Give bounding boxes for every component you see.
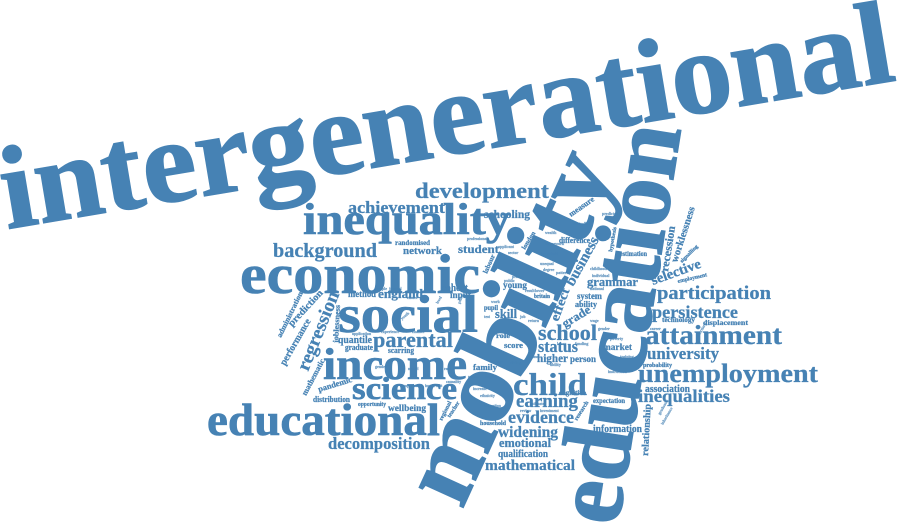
tiny words: degree <box>543 267 554 272</box>
tiny words: gender <box>598 326 610 331</box>
word: background: background <box>273 240 377 262</box>
word: emotional: emotional <box>499 435 551 450</box>
tiny words: increase <box>473 386 487 391</box>
tiny words: job <box>519 314 526 319</box>
word: selective: selective <box>649 257 703 289</box>
tiny words: labor <box>557 341 566 346</box>
tiny words: poverty <box>610 336 623 341</box>
rotated words: pandemic <box>317 375 353 394</box>
word: educational: educational <box>207 395 440 445</box>
rotated words: joblessness <box>331 305 342 344</box>
tiny words: sibling <box>510 360 521 365</box>
tiny words: individual <box>592 273 610 278</box>
medium words: young <box>503 281 527 291</box>
word: development: development <box>415 178 550 203</box>
rotated words: hypothesis <box>608 227 618 252</box>
word: parental: parental <box>373 327 453 352</box>
tiny words: choice <box>407 295 418 300</box>
medium words: expectation <box>593 397 625 405</box>
word: widening: widening <box>498 424 558 441</box>
medium words: distribution <box>313 395 350 404</box>
word: inequalities: inequalities <box>638 386 730 406</box>
tiny words <box>352 211 707 426</box>
rotated words: business <box>563 234 603 289</box>
tiny words: applicant <box>498 244 515 249</box>
tiny words: estimate <box>530 401 544 406</box>
medium words: opportunity <box>358 402 386 408</box>
tiny words: tertiary <box>697 322 707 336</box>
rotated words: labour <box>482 253 497 275</box>
medium words: higher <box>537 351 569 365</box>
tiny words: review <box>520 408 531 413</box>
medium words: ability <box>575 299 598 309</box>
tiny words: migration <box>484 403 502 408</box>
medium words: method <box>348 289 376 299</box>
medium words: market <box>603 343 633 353</box>
rotated words: grade <box>559 302 594 331</box>
tiny words: instruction <box>608 369 627 374</box>
word: science: science <box>352 370 457 406</box>
rotated words: prediction <box>286 288 326 329</box>
word: economic: economic <box>240 244 480 306</box>
tiny words: funding <box>575 341 588 346</box>
tiny words: inheritance <box>660 406 674 426</box>
word: unemployment: unemployment <box>638 359 818 388</box>
tiny words: application <box>352 331 372 336</box>
medium words: displacement <box>703 318 749 327</box>
word: grammar: grammar <box>587 274 638 289</box>
medium words: probability <box>643 362 673 369</box>
tiny words: wage <box>494 359 503 364</box>
rotated words: effect <box>547 285 573 323</box>
tiny words: glass <box>530 354 539 359</box>
tiny words: national <box>590 286 605 291</box>
tiny words: household <box>541 251 559 256</box>
tiny words: public <box>504 278 515 283</box>
tiny words: english <box>485 374 498 379</box>
tiny words: finance <box>412 329 425 334</box>
word: evidence: evidence <box>508 407 574 427</box>
word: achievement: achievement <box>348 198 446 217</box>
medium words: england <box>378 286 424 301</box>
tiny words: model <box>408 366 419 371</box>
tiny words: ability <box>550 362 561 367</box>
tiny words: comparison <box>400 383 421 388</box>
medium words: wellbeing <box>388 404 426 414</box>
tiny words: graduates <box>657 398 670 416</box>
tiny words: return <box>528 318 540 323</box>
rotated words: teacher <box>447 400 462 419</box>
medium words: estimation <box>620 250 647 258</box>
medium words: system <box>577 291 602 301</box>
rotated words: administration <box>275 289 305 339</box>
tiny words: causality <box>446 379 461 384</box>
rotated words: worklessness <box>669 205 698 264</box>
word: regression: regression <box>293 288 344 374</box>
tiny words: predict <box>512 274 525 279</box>
medium words: network <box>403 245 443 257</box>
rotated words: mathematic <box>300 357 327 397</box>
medium words: skill <box>495 306 517 321</box>
tiny words: training <box>620 354 634 359</box>
tiny words: pattern <box>556 270 569 275</box>
medium words: cohort <box>442 283 468 294</box>
word: decomposition: decomposition <box>328 434 431 453</box>
word: status: status <box>538 337 578 356</box>
tiny words: childhood <box>590 266 608 271</box>
rotated words: signalling <box>679 244 700 264</box>
tiny words: gender <box>375 364 387 369</box>
medium words: household <box>480 421 507 427</box>
medium words: schooling <box>484 209 530 221</box>
tiny words: ethnicity <box>480 393 495 398</box>
medium words: information <box>593 424 642 435</box>
tiny words: framework <box>545 241 565 246</box>
tiny words: youth <box>399 310 411 321</box>
tiny words: lower <box>535 288 545 293</box>
word: inequality: inequality <box>303 195 510 244</box>
word: income: income <box>323 340 467 389</box>
rotated words: recession <box>659 225 678 272</box>
tiny words: wage <box>590 318 599 323</box>
tiny words: career <box>650 326 661 331</box>
word: qualification: qualification <box>498 449 548 460</box>
medium words <box>313 209 749 435</box>
rotated words: measure <box>567 194 596 219</box>
word: participation: participation <box>657 283 771 304</box>
medium words: student <box>458 242 499 256</box>
tiny words: region <box>468 374 480 379</box>
word: persistence: persistence <box>652 302 738 322</box>
rotated words: relationship <box>640 403 654 456</box>
medium words: scarring <box>388 346 414 355</box>
medium words: graduate <box>345 343 373 352</box>
tiny words: race <box>444 366 452 371</box>
rotated words: performance <box>278 317 314 368</box>
word: attainment: attainment <box>645 320 782 350</box>
rotated words: london <box>521 230 537 251</box>
tiny words: investment <box>540 408 559 413</box>
tiny words: controlled <box>573 221 591 226</box>
tiny words: professional <box>467 236 488 241</box>
tiny words: sector <box>508 250 518 255</box>
tiny words: level <box>435 294 443 304</box>
word: education: education <box>533 116 703 525</box>
rotated words: regional <box>438 400 453 422</box>
word: university: university <box>647 344 719 363</box>
tiny words: important <box>425 383 443 388</box>
word: earning: earning <box>516 391 578 412</box>
tiny words: experience <box>381 329 399 334</box>
medium words: difference <box>559 236 590 245</box>
word: school: school <box>538 320 597 345</box>
rotated words <box>275 194 708 456</box>
word: mathematical: mathematical <box>485 458 575 474</box>
tiny words: journal <box>388 286 403 291</box>
medium words: association <box>645 384 690 395</box>
tiny words: sample <box>375 286 387 291</box>
medium words: randomised <box>395 239 430 247</box>
medium words: role <box>496 332 510 340</box>
rotated words: employment <box>677 272 708 285</box>
tiny words: unequal <box>540 261 555 266</box>
tiny words: policy <box>456 293 464 304</box>
tiny words: test <box>484 314 491 319</box>
medium words: cognitive <box>559 389 586 397</box>
medium words: input <box>450 291 472 301</box>
medium words: technology <box>662 316 696 324</box>
tiny words: predicted <box>602 211 619 216</box>
tiny words: result <box>525 288 535 293</box>
tiny words: work <box>491 299 501 304</box>
word: mobility: mobility <box>376 131 638 520</box>
medium words: britain <box>534 294 551 300</box>
medium words: score <box>504 340 523 350</box>
medium words: pupil <box>484 304 498 312</box>
rotated words: research <box>574 400 591 422</box>
word: child: child <box>513 366 587 402</box>
medium words: person <box>570 355 597 365</box>
tiny words: wealth <box>545 230 557 235</box>
medium words: quantile <box>338 334 372 346</box>
word: social: social <box>338 286 478 344</box>
medium words: family <box>473 362 498 372</box>
